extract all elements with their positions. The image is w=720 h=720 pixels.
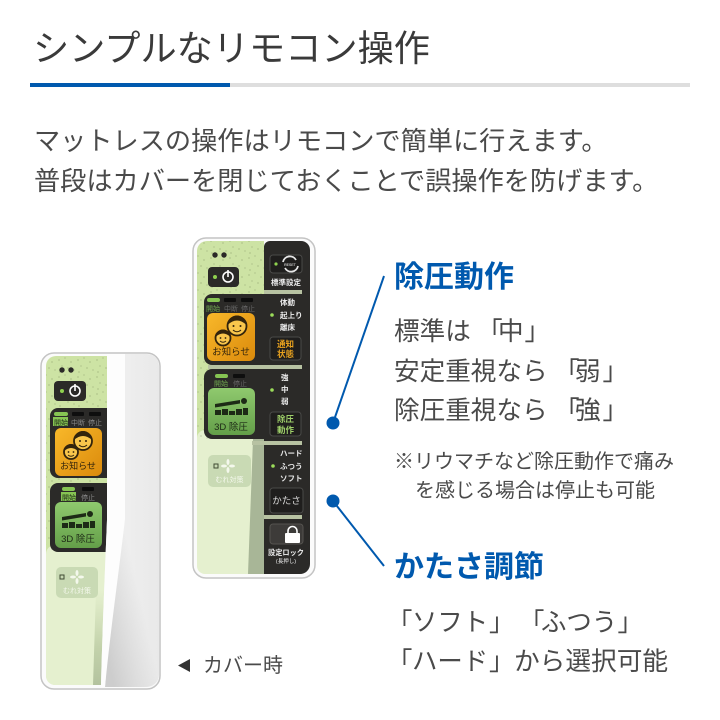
pressure description: 標準は bbox=[394, 317, 471, 346]
firmness labels: ソフト bbox=[280, 474, 302, 483]
firmness description: 「 bbox=[519, 609, 544, 637]
odor button: むれ対策 bbox=[63, 586, 91, 595]
intro text: 普段はカバーを閉じておくことで誤操作を防げます。 bbox=[34, 166, 658, 196]
heading: pressure action: 除圧動作 bbox=[394, 261, 514, 294]
icon: 3D button: 3D 除圧 bbox=[61, 533, 95, 545]
pressure description: 「 bbox=[554, 396, 580, 425]
firmness description: 」 bbox=[618, 609, 643, 637]
firmness description: ソフト bbox=[412, 609, 488, 637]
firmness labels: ハード bbox=[280, 449, 302, 458]
firmness labels bbox=[270, 449, 303, 513]
mode labels: 通知 bbox=[277, 339, 294, 349]
pressure labels: 強 bbox=[281, 372, 289, 382]
pressure note bbox=[394, 450, 674, 502]
firmness description: 」 bbox=[489, 648, 514, 676]
notification panel bbox=[50, 408, 108, 478]
firmness description: 「 bbox=[387, 648, 412, 676]
pressure description: 」 bbox=[602, 397, 628, 425]
power button bbox=[208, 252, 239, 287]
pressure labels bbox=[270, 372, 301, 436]
pressure note: を感じる場合は停止も可能 bbox=[415, 479, 655, 502]
title: シンプルなリモコン操作 bbox=[33, 28, 430, 69]
pressure description: 安定重視なら bbox=[394, 357, 548, 386]
firmness description: 「 bbox=[387, 609, 412, 637]
odor button: むれ対策 bbox=[216, 475, 244, 484]
notification panel bbox=[204, 294, 264, 365]
arrow: firmness callout bbox=[326, 494, 384, 566]
notification panel: 中断 bbox=[71, 418, 85, 427]
remote: cover open bbox=[193, 238, 315, 578]
mode labels: 状態 bbox=[277, 349, 294, 359]
intro text: マットレスの操作はリモコンで簡単に行えます。 bbox=[34, 126, 608, 156]
mode labels: 体動 bbox=[280, 297, 295, 307]
firmness description: ハード bbox=[412, 648, 488, 676]
power button bbox=[54, 367, 86, 401]
lock button: 設定ロック bbox=[268, 548, 304, 557]
notification panel: 開始 bbox=[54, 418, 68, 427]
pressure description: 除圧重視なら bbox=[394, 396, 548, 425]
intro text bbox=[34, 126, 658, 196]
heading: firmness adjustment: かたさ調節 bbox=[394, 551, 544, 584]
mode labels bbox=[270, 297, 302, 360]
pressure note: ※リウマチなど除圧動作で痛み bbox=[394, 450, 674, 473]
3D pressure panel: 開始 bbox=[62, 493, 76, 502]
pressure description: 弱 bbox=[575, 358, 601, 386]
mode labels: 離床 bbox=[280, 322, 295, 332]
title underline bbox=[30, 83, 690, 87]
reset button: RESET bbox=[284, 263, 297, 267]
pressure labels: 動作 bbox=[277, 425, 294, 435]
lock button bbox=[268, 524, 304, 565]
pressure description: 「 bbox=[477, 317, 503, 346]
3D pressure panel: 開始 bbox=[214, 379, 228, 388]
reset button bbox=[270, 255, 302, 287]
notification panel: 中断 bbox=[224, 304, 238, 313]
pressure description: 「 bbox=[554, 357, 580, 386]
remote: cover closed bbox=[41, 353, 160, 689]
arrow: pressure callout bbox=[326, 276, 384, 430]
notification panel: 停止 bbox=[88, 418, 102, 427]
pressure labels: 弱 bbox=[281, 397, 288, 406]
icon: 3D button: 3D 除圧 bbox=[214, 421, 248, 433]
pressure description: 」 bbox=[602, 358, 628, 386]
icon: notification button: お知らせ bbox=[212, 346, 250, 358]
firmness description bbox=[387, 609, 668, 676]
firmness description: から選択可能 bbox=[514, 647, 668, 676]
firmness description: 」 bbox=[489, 609, 514, 637]
firmness labels: ふつう bbox=[280, 461, 302, 471]
3D pressure panel bbox=[204, 369, 264, 439]
firmness description: ふつう bbox=[541, 609, 617, 637]
pressure description: 強 bbox=[575, 396, 601, 425]
icon: notification button: お知らせ bbox=[60, 460, 96, 471]
3D pressure panel: 停止 bbox=[81, 493, 95, 502]
firmness labels: かたさ bbox=[272, 496, 301, 507]
pressure description: 中 bbox=[498, 317, 524, 346]
pressure labels: 除圧 bbox=[277, 414, 294, 424]
3D pressure panel bbox=[50, 483, 108, 552]
cover caption: カバー時 bbox=[203, 654, 283, 677]
mode labels: 起上り bbox=[280, 310, 302, 320]
3D pressure panel: 停止 bbox=[233, 379, 247, 388]
notification panel: 開始 bbox=[206, 304, 220, 313]
notification panel: 停止 bbox=[241, 304, 255, 313]
pressure description: 」 bbox=[524, 318, 550, 346]
odor button bbox=[56, 567, 98, 598]
odor button bbox=[208, 455, 251, 487]
sliding cover bbox=[101, 354, 159, 687]
pressure labels: 中 bbox=[281, 384, 288, 394]
lock button: (長押し) bbox=[276, 557, 296, 565]
reset button: 標準設定 bbox=[271, 277, 301, 287]
pressure description bbox=[394, 317, 628, 425]
